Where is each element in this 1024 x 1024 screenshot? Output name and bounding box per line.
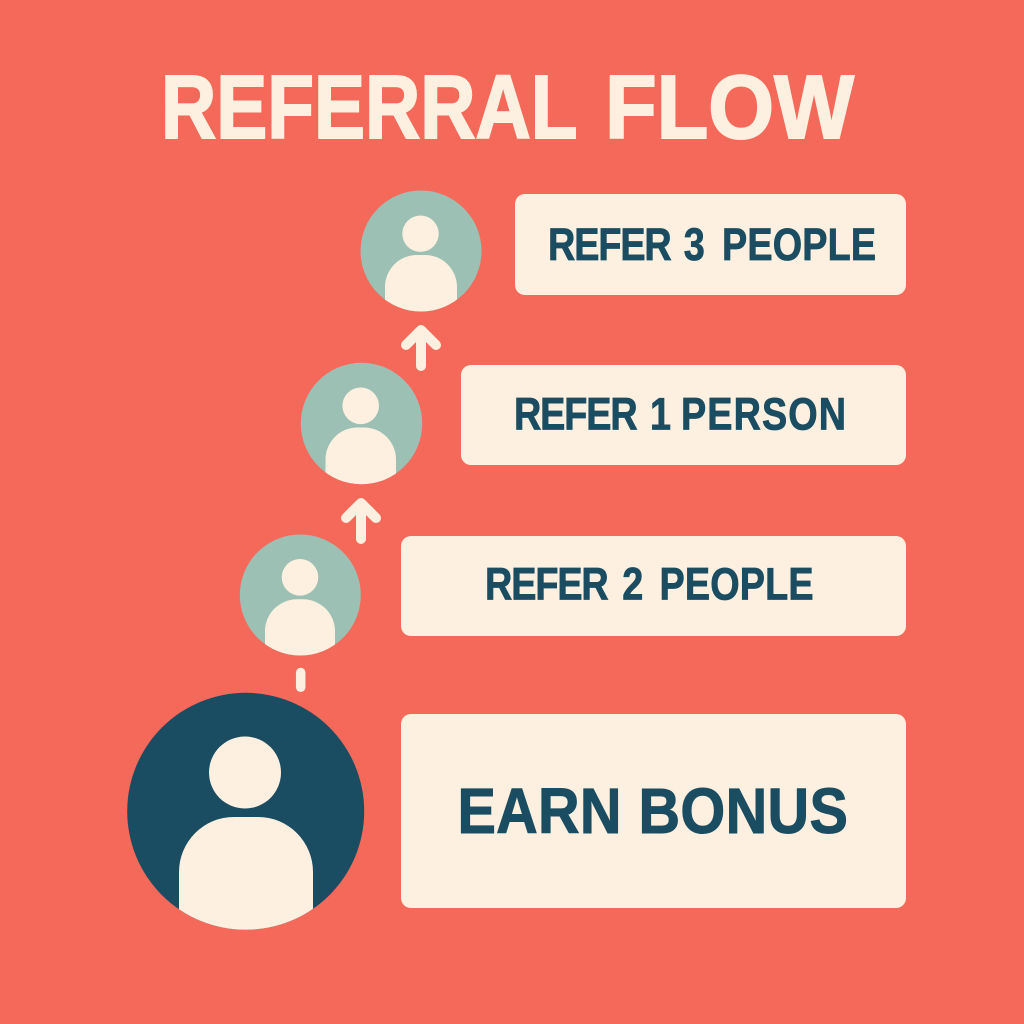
label box: earn bonus: BONUS bbox=[638, 775, 848, 847]
title: REFERRAL bbox=[161, 56, 577, 157]
label box: refer 2 people bbox=[401, 536, 906, 636]
label box: refer 1 person: REFER bbox=[514, 388, 638, 439]
label box: refer 3 people: PEOPLE bbox=[722, 219, 876, 270]
step: refer 1 person bbox=[301, 363, 906, 492]
arrow: step 2 to step 3 bbox=[406, 330, 436, 366]
label box: refer 3 people: 3 bbox=[684, 219, 705, 270]
title bbox=[161, 56, 855, 158]
label box: refer 2 people: REFER bbox=[485, 558, 609, 609]
label box: earn bonus: EARN bbox=[457, 775, 622, 847]
label box: refer 2 people: 2 bbox=[622, 558, 643, 609]
step: refer 2 people bbox=[240, 534, 906, 664]
step: refer 3 people bbox=[360, 190, 906, 320]
label box: refer 1 person: 1 bbox=[650, 388, 671, 439]
label box: refer 2 people: PEOPLE bbox=[659, 558, 814, 609]
label box: refer 3 people bbox=[515, 194, 906, 295]
arrow: step 1 to step 2 bbox=[346, 503, 376, 539]
label box: refer 3 people: REFER bbox=[548, 219, 672, 270]
label box: earn bonus bbox=[401, 714, 906, 908]
label box: refer 1 person bbox=[461, 365, 906, 465]
icon: person 3 bbox=[360, 190, 482, 320]
icon: person 2 bbox=[301, 363, 422, 492]
connector: bonus to step 1 bbox=[296, 672, 305, 687]
step: earn bonus bbox=[127, 693, 906, 940]
title: FLOW bbox=[605, 57, 855, 158]
icon: main person bbox=[127, 693, 364, 940]
icon: person 1 bbox=[240, 534, 361, 664]
label box: refer 1 person: PERSON bbox=[681, 388, 847, 439]
